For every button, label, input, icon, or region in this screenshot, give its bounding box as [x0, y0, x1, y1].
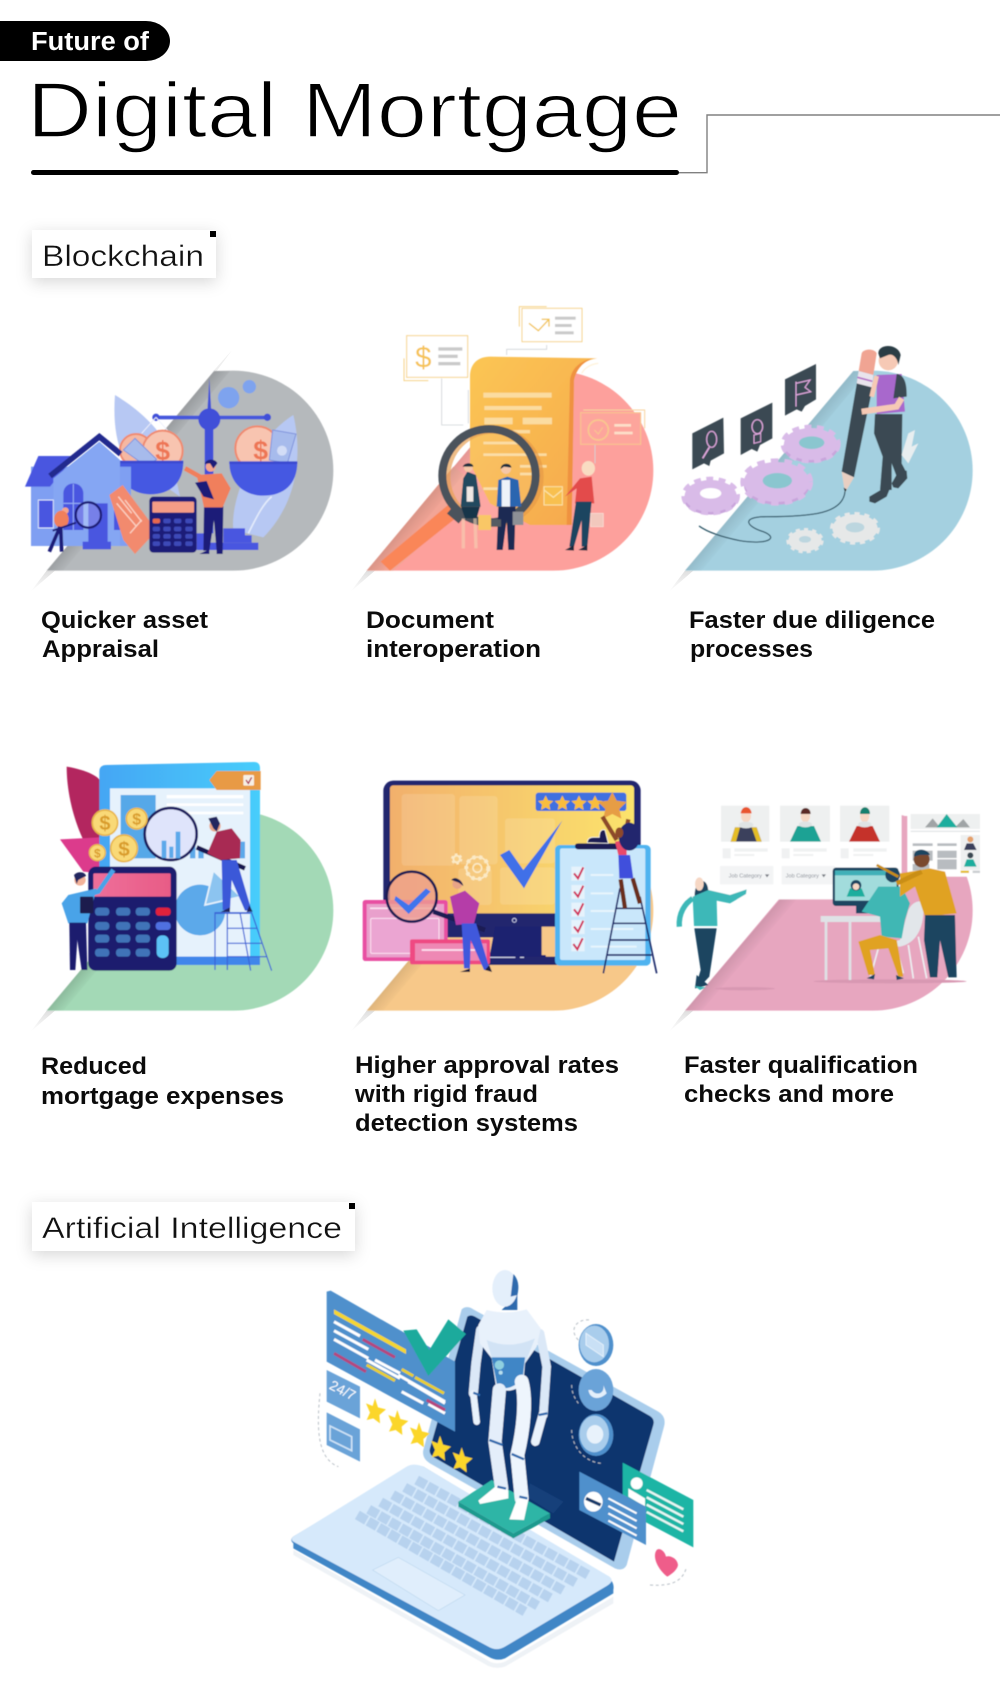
illustration: scales, house and calculator: $ [155, 436, 170, 466]
laptop base [291, 1465, 614, 1660]
illustration: candidates, desk and team: Job Category [786, 874, 819, 880]
24/7 card [327, 1370, 360, 1418]
chat bot card [579, 1472, 646, 1545]
label: Document interoperation: Document [366, 607, 494, 634]
label: Document interoperation [366, 607, 541, 663]
label: Reduced mortgage expenses: mortgage expenses [41, 1083, 284, 1110]
robot [458, 1270, 563, 1538]
section heading: Blockchain [32, 230, 216, 278]
illustration: document and magnifier [367, 307, 653, 571]
heart [655, 1549, 678, 1577]
panel: faster due diligence processes [669, 346, 973, 592]
panel: reduced mortgage expenses [31, 762, 333, 1032]
illustration: calculator, coins and report: $ [132, 812, 141, 829]
illustration: monitor, checklist and rating [363, 781, 657, 1011]
label: Higher approval rates with rigid fraud detection systems: Higher approval rates [355, 1052, 619, 1079]
illustration: calculator, coins and report: $ [94, 846, 101, 860]
label: Faster due diligence processes [689, 607, 935, 663]
label: Higher approval rates with rigid fraud detection systems: with rigid fraud [354, 1081, 538, 1108]
profile card [623, 1463, 693, 1547]
section heading: Artificial Intelligence [32, 1202, 355, 1251]
label: Higher approval rates with rigid fraud detection systems: detection systems [355, 1110, 578, 1137]
label: Faster qualification checks and more: checks and more [684, 1081, 894, 1108]
rating stars [366, 1398, 473, 1472]
section heading: Blockchain: Blockchain [42, 240, 204, 273]
illustration: calculator, coins and report: $ [99, 813, 111, 835]
illustration: document and magnifier: $ [415, 341, 431, 374]
illustration: calculator, coins and report [47, 762, 333, 1011]
label: Document interoperation: interoperation [366, 636, 541, 663]
label: Faster due diligence processes: processes [690, 636, 813, 663]
illustration: pencil, gears and speech bubbles [684, 346, 973, 571]
heading underline [31, 170, 679, 175]
label: Quicker asset Appraisal: Quicker asset [41, 607, 208, 634]
label: Higher approval rates with rigid fraud detection systems [354, 1052, 619, 1137]
check mark [403, 1319, 466, 1376]
trackpad [373, 1557, 465, 1611]
label: Quicker asset Appraisal: Appraisal [42, 636, 159, 663]
title block [0, 21, 682, 175]
contact icons [318, 1320, 687, 1585]
laptop screen [423, 1307, 665, 1569]
label: Faster qualification checks and more [684, 1052, 918, 1108]
label: Faster qualification checks and more: Faster qualification [684, 1052, 918, 1079]
illustration: candidates, desk and team: Job Category [729, 874, 762, 880]
panel: quicker asset appraisal [25, 351, 333, 592]
badge: Future of: Future of [31, 28, 150, 56]
section heading: Artificial Intelligence: Artificial Intelligence [42, 1212, 342, 1245]
panel: document interoperation [351, 307, 653, 592]
label: Quicker asset Appraisal [41, 607, 208, 663]
illustration: AI robot on laptop [291, 1270, 693, 1668]
24/7 card: 24/7 [327, 1377, 359, 1403]
badge: Future of [0, 21, 170, 61]
label: Reduced mortgage expenses: Reduced [41, 1053, 147, 1080]
panel: faster qualification checks [669, 800, 982, 1032]
heading: Digital Mortgage: Digital Mortgage [27, 66, 682, 154]
laptop shadow [293, 1550, 613, 1668]
panel: higher approval rates [351, 781, 657, 1032]
card icon [327, 1412, 360, 1462]
illustration: calculator, coins and report: $ [118, 838, 130, 861]
illustration: scales, house and calculator: $ [253, 435, 268, 465]
label: Reduced mortgage expenses [41, 1053, 284, 1110]
keyboard [357, 1480, 588, 1612]
label: Faster due diligence processes: Faster due diligence [689, 607, 935, 634]
left data panel [327, 1291, 455, 1432]
illustration: candidates, desk and team [673, 800, 982, 1011]
illustration: scales, house and calculator [25, 371, 333, 571]
